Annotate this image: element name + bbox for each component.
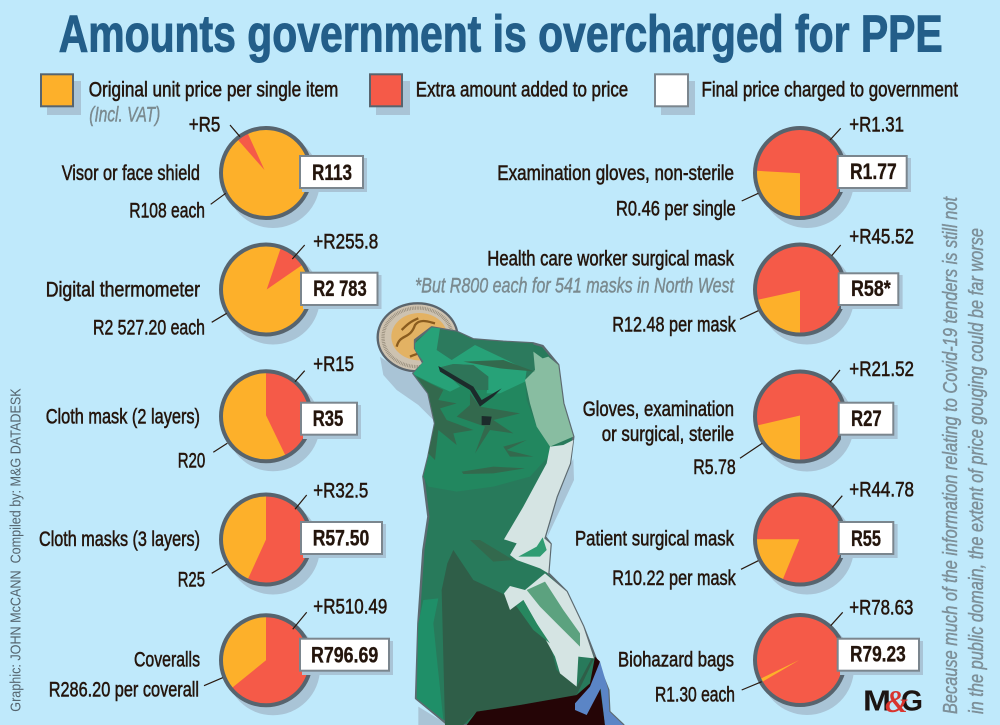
- panel: health care worker surgical mask: [415, 225, 914, 344]
- label: examination gloves: Examination gloves, non-sterile: [497, 162, 734, 185]
- logo: M&G: M: [863, 686, 891, 718]
- legend: original price: [41, 74, 338, 115]
- panel: biohazard bags: [618, 596, 923, 715]
- label: R5.78: R5.78: [693, 456, 736, 479]
- pie: cloth mask 2 layers: [219, 369, 318, 472]
- pie: coveralls: [219, 613, 320, 716]
- legend: final price: [655, 74, 958, 115]
- label: cloth mask 2 layers: Cloth mask (2 layers): [46, 405, 200, 428]
- price box: R27: [839, 403, 898, 439]
- price box: R1.77: R1.77: [850, 159, 897, 184]
- price box: R113: R113: [312, 160, 352, 185]
- legend: [41, 74, 958, 127]
- label: +R45.52: +R45.52: [849, 225, 914, 248]
- price box: R35: [301, 403, 361, 439]
- pie: examination gloves: [753, 126, 852, 228]
- price box: R796.69: R796.69: [311, 642, 378, 667]
- label: +R21.52: +R21.52: [849, 358, 914, 381]
- label: R0.46 per single: R0.46 per single: [616, 198, 736, 221]
- side note: line 2: in the public domain, the extent of price gouging could be far worse: [966, 228, 988, 714]
- label: cloth masks 3 layers: Cloth masks (3 layers): [39, 528, 200, 551]
- label: biohazard bags: Biohazard bags: [618, 649, 734, 672]
- legend: VAT note: (Incl. VAT): [89, 104, 160, 127]
- pie: health care worker mask: [753, 242, 852, 344]
- panel: coveralls: [49, 595, 393, 720]
- label: R108 each: R108 each: [129, 200, 205, 223]
- label: R286.20 per coverall: R286.20 per coverall: [49, 679, 199, 702]
- label: +R255.8: +R255.8: [313, 230, 378, 253]
- note: North West masks: *But R800 each for 541 masks in North West: [415, 275, 735, 298]
- label: R12.48 per mask: R12.48 per mask: [612, 314, 736, 337]
- pie: cloth masks 3 layers: [219, 492, 319, 594]
- label: +R1.31: +R1.31: [849, 114, 904, 137]
- price box: R2 783: [301, 273, 382, 309]
- panel: visor or face shield: [62, 114, 367, 228]
- label: +R15: +R15: [313, 353, 354, 376]
- label: R25: R25: [178, 569, 205, 592]
- label: R20: R20: [178, 449, 205, 472]
- price box: R79.23: [838, 639, 923, 675]
- label: R1.30 each: R1.30 each: [655, 684, 735, 707]
- pie: sterile gloves: [753, 370, 852, 472]
- label: R2 527.20 each: R2 527.20 each: [93, 316, 205, 339]
- glove: [413, 327, 623, 725]
- label: gloves line 1: Gloves, examination: [583, 398, 734, 421]
- price box: R796.69: [300, 639, 393, 675]
- pie: visor: [221, 124, 320, 228]
- price box: R57.50: [301, 522, 386, 558]
- label: visor: Visor or face shield: [62, 162, 200, 185]
- pie: patient surgical mask: [753, 492, 853, 594]
- price box: R55: R55: [851, 526, 881, 551]
- pie: biohazard bags: [753, 613, 854, 715]
- price box: R27: R27: [851, 406, 882, 431]
- side note: line 1: Because much of the information relating to Covid-19 tenders is still not: [940, 196, 962, 714]
- panel: patient surgical mask: [575, 479, 914, 600]
- legend: extra amount: Extra amount added to price: [416, 79, 628, 102]
- label: +R5: +R5: [189, 114, 220, 137]
- price box: R1.77: [838, 156, 911, 192]
- label: +R510.49: +R510.49: [313, 595, 387, 618]
- panel: cloth mask 2 layers: [46, 353, 361, 476]
- icon: coin: [378, 303, 458, 371]
- price box: R55: [839, 522, 898, 558]
- pie: thermometer: [221, 236, 320, 344]
- price box: R57.50: R57.50: [313, 525, 369, 550]
- price box: R79.23: R79.23: [850, 642, 906, 667]
- label: thermometer: Digital thermometer: [46, 279, 200, 302]
- price box: R58*: R58*: [851, 276, 891, 301]
- label: health care worker mask: Health care worker surgical mask: [487, 248, 734, 271]
- illustration: gloved hand holding a coin: [378, 303, 623, 725]
- credit: graphic and compiler: Graphic: JOHN McCANN Compiled by: M&G DATADESK: [8, 388, 24, 712]
- panel: cloth masks 3 layers: [39, 480, 386, 600]
- logo: M&G: G: [901, 686, 923, 718]
- legend: extra amount: [370, 74, 628, 115]
- label: R10.22 per mask: R10.22 per mask: [612, 567, 736, 590]
- panel: digital thermometer: [46, 230, 381, 344]
- label: +R78.63: +R78.63: [849, 596, 913, 619]
- logo: M&G: [863, 683, 923, 719]
- price box: R2 783: R2 783: [313, 276, 367, 301]
- price box: R58*: [839, 273, 903, 309]
- price box: R35: R35: [313, 406, 343, 431]
- label: patient surgical mask: Patient surgical mask: [575, 528, 734, 551]
- label: gloves line 2: or surgical, sterile: [602, 423, 734, 446]
- label: +R44.78: +R44.78: [849, 479, 914, 502]
- price box: R113: [300, 156, 367, 192]
- logo: M&G: &: [885, 683, 908, 719]
- panel: gloves, examination or surgical, sterile: [583, 358, 914, 479]
- panel: examination gloves: [497, 114, 911, 228]
- label: coveralls: Coveralls: [134, 649, 200, 672]
- legend: original price: Original unit price per single item: [89, 79, 338, 102]
- label: +R32.5: +R32.5: [313, 480, 368, 503]
